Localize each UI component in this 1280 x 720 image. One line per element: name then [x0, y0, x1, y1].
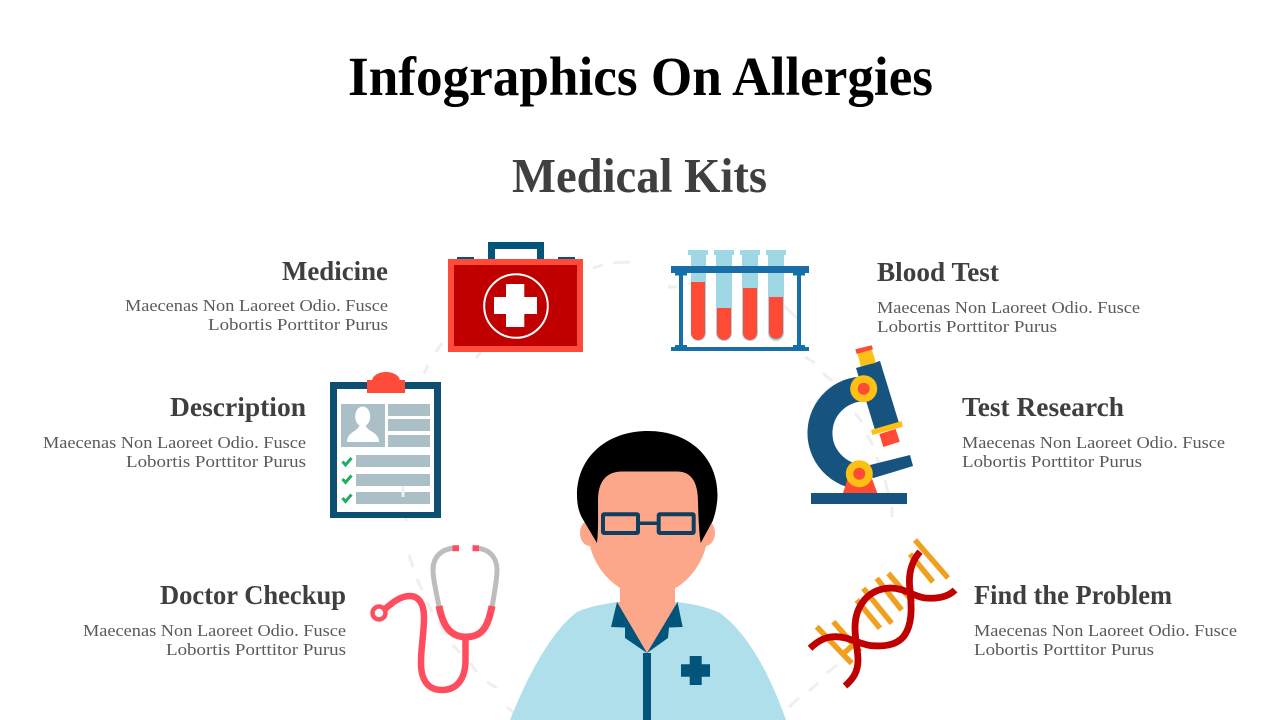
- shirt: [510, 602, 786, 720]
- text: Test Research: Lobortis Porttitor Purus: [962, 452, 1142, 471]
- glasses: [603, 514, 694, 533]
- text: Find the Problem: Find the Problem: [974, 580, 1172, 610]
- text: Blood Test: Lobortis Porttitor Purus: [877, 317, 1057, 336]
- text: Test Research: Test Research: [962, 392, 1124, 422]
- hair: [577, 431, 718, 543]
- text: Blood Test: [877, 257, 1140, 336]
- icon: microscope: [811, 345, 913, 504]
- text: Blood Test: Maecenas Non Laoreet Odio. Fusce: [877, 298, 1140, 317]
- text: Test Research: Maecenas Non Laoreet Odio. Fusce: [962, 433, 1225, 452]
- text: Description: Maecenas Non Laoreet Odio. Fusce: [43, 433, 306, 452]
- text: Medicine: Medicine: [282, 256, 388, 286]
- text: Test Research: [962, 392, 1225, 471]
- text: Medicine: Lobortis Porttitor Purus: [208, 315, 388, 334]
- neck: [617, 580, 675, 653]
- text: Doctor Checkup: Doctor Checkup: [160, 580, 346, 610]
- text: Medicine: Maecenas Non Laoreet Odio. Fusce: [125, 296, 388, 315]
- collar: [611, 602, 683, 653]
- ears: [580, 520, 600, 546]
- face: [588, 470, 708, 596]
- icon: clipboard: [330, 372, 441, 518]
- text: Description: Description: [170, 392, 306, 422]
- text: Blood Test: Blood Test: [877, 257, 999, 287]
- placket: [643, 653, 651, 720]
- text: Find the Problem: Lobortis Porttitor Purus: [974, 640, 1154, 659]
- text: Description: [43, 392, 306, 471]
- icon: DNA helix: [810, 540, 955, 686]
- icon: stethoscope: [372, 548, 497, 690]
- text: Doctor Checkup: Lobortis Porttitor Purus: [166, 640, 346, 659]
- text: Doctor Checkup: [83, 580, 346, 659]
- icon: test tubes: [671, 250, 809, 351]
- text: Description: Lobortis Porttitor Purus: [126, 452, 306, 471]
- subtitle: Medical Kits: [512, 148, 767, 203]
- doctor illustration: [510, 431, 786, 720]
- icon: first aid kit: [448, 246, 583, 352]
- title: Infographics On Allergies: [348, 46, 933, 107]
- text: Medicine: [125, 256, 388, 334]
- text: Doctor Checkup: Maecenas Non Laoreet Odio. Fusce: [83, 621, 346, 640]
- text: Find the Problem: Maecenas Non Laoreet Odio. Fusce: [974, 621, 1237, 640]
- shirt cross: [681, 656, 710, 685]
- text: Find the Problem: [974, 580, 1237, 659]
